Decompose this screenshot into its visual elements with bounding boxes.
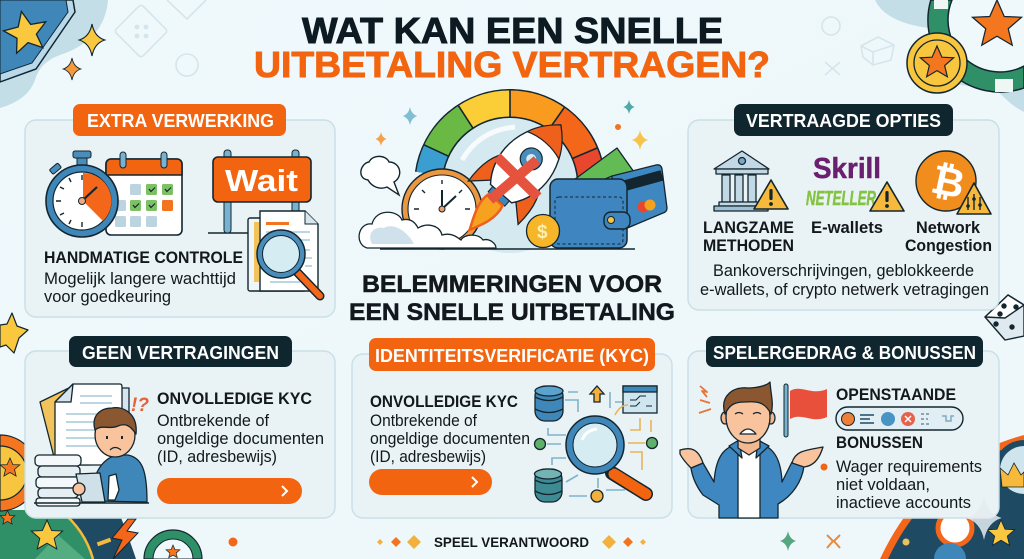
footer: speel verantwoord: SPEEL VERANTWOORD: [434, 534, 589, 550]
footer: speel verantwoord: [377, 534, 646, 550]
heading pill: [69, 336, 292, 367]
central illustration: gauge, rocket, clock, wallet: [359, 90, 667, 253]
baseline: [380, 248, 635, 250]
icon: worried person: [73, 408, 147, 502]
coin: $: [537, 222, 548, 243]
text block: (ID, adresbewijs): [370, 448, 486, 466]
logo: skrill: Skrill: [813, 153, 881, 185]
decoration: green sparkle: [780, 531, 796, 551]
sparkles: [375, 100, 648, 240]
heading pill: [369, 338, 655, 371]
decoration: watermark sparkle: [966, 496, 1002, 540]
icon: warning network: [957, 183, 991, 214]
gauge: [424, 90, 597, 253]
heading pill: [706, 336, 983, 367]
heading text: GEEN VERTRAGINGEN: [82, 343, 279, 363]
status bar: [836, 407, 963, 430]
heading pill: [73, 104, 286, 136]
text block: [157, 389, 324, 466]
button: [157, 478, 302, 504]
decoration: orange cross: [827, 535, 840, 548]
decoration: faint background shapes: [114, 0, 894, 76]
central heading: BELEMMERINGEN VOOR: [362, 271, 662, 298]
text block: Wager requirements: [836, 458, 982, 476]
baseline: [34, 502, 149, 504]
icon: wait sign: Wait: [225, 163, 298, 198]
bullet: [820, 464, 828, 470]
text block: ONVOLLEDIGE KYC: [157, 389, 312, 408]
decoration: bottom left casino shapes: [0, 435, 202, 559]
labels: Network: [916, 218, 981, 237]
central heading: EEN SNELLE UITBETALING: [349, 299, 675, 326]
labels: [703, 218, 992, 255]
text block: ongeldige documenten: [370, 430, 530, 448]
icon: stopwatch: [46, 151, 118, 237]
icon: bank: [714, 151, 769, 211]
text block: ongeldige documenten: [157, 430, 324, 448]
text block: ONVOLLEDIGE KYC: [370, 392, 518, 411]
text: bonussen: BONUSSEN: [836, 433, 923, 452]
icon: warning bank: [754, 180, 788, 209]
text block: Ontbrekende of: [370, 412, 477, 430]
coin: [526, 214, 560, 248]
decoration: bottom right casino shapes: [880, 435, 1024, 559]
icon: warning e-wallet: [870, 182, 904, 211]
labels: LANGZAME: [703, 218, 794, 237]
text block: [836, 458, 982, 512]
text block: (ID, adresbewijs): [157, 448, 277, 466]
logo: neteller: NETELLER: [806, 188, 876, 210]
icon: document pile: [35, 384, 129, 506]
panel: vertraagde opties: [688, 104, 999, 310]
labels: METHODEN: [703, 236, 794, 255]
text block: Bankoverschrijvingen, geblokkeerde: [713, 262, 974, 280]
text block: [700, 262, 989, 299]
decoration: orange dot: [228, 538, 238, 546]
decoration: top right chip and coin: [875, 0, 1024, 112]
icon: wait sign: [208, 150, 311, 233]
heading text: IDENTITEITSVERIFICATIE (KYC): [375, 346, 649, 366]
text: openstaande: OPENSTAANDE: [836, 385, 956, 404]
rocket: [444, 103, 586, 252]
decoration: top left chip and stars: [0, 0, 108, 108]
icon: data verification diagram: [534, 386, 658, 502]
cloud: [359, 212, 496, 248]
title: [254, 10, 770, 85]
heading text: EXTRA VERWERKING: [87, 111, 274, 131]
clock: [402, 169, 482, 249]
heading text: SPELERGEDRAG & BONUSSEN: [713, 343, 976, 363]
icon: question mark: !?: [131, 395, 149, 416]
text block: Mogelijk langere wachttijd: [44, 270, 236, 288]
text block: [44, 248, 243, 306]
red cross: [490, 157, 538, 200]
money and card: [563, 148, 667, 229]
text block: [370, 392, 530, 466]
text block: voor goedkeuring: [44, 288, 171, 306]
labels: E-wallets: [811, 218, 883, 237]
title: WAT KAN EEN SNELLE: [302, 10, 723, 51]
text block: inactieve accounts: [836, 494, 971, 512]
panel: extra verwerking: [25, 104, 335, 317]
cloud bubble: [361, 156, 400, 195]
icon: red flag: [784, 384, 827, 437]
labels: Congestion: [905, 236, 992, 255]
icon: calendar: [106, 152, 182, 235]
heading pill: [734, 104, 953, 136]
panel: spelergedrag en bonussen: [680, 336, 999, 518]
central heading: [349, 271, 675, 326]
decoration: right die: [985, 295, 1024, 340]
icon: stressed person: [680, 382, 823, 518]
icon: bitcoin: ₿: [928, 158, 969, 207]
panel: geen vertragingen: [25, 336, 335, 518]
title: UITBETALING VERTRAGEN?: [254, 44, 770, 85]
decoration: left star: [0, 313, 28, 353]
icon: bitcoin: [916, 151, 976, 211]
text block: Ontbrekende of: [157, 412, 269, 430]
panel: identiteitsverificatie: [352, 338, 672, 518]
wallet: [550, 179, 630, 248]
icon: documents and magnifier: [248, 211, 320, 296]
button: [369, 469, 492, 495]
text block: e-wallets, of crypto netwerk vetragingen: [700, 281, 989, 299]
text block: HANDMATIGE CONTROLE: [44, 248, 243, 267]
text block: niet voldaan,: [836, 476, 930, 494]
heading text: VERTRAAGDE OPTIES: [746, 111, 941, 131]
